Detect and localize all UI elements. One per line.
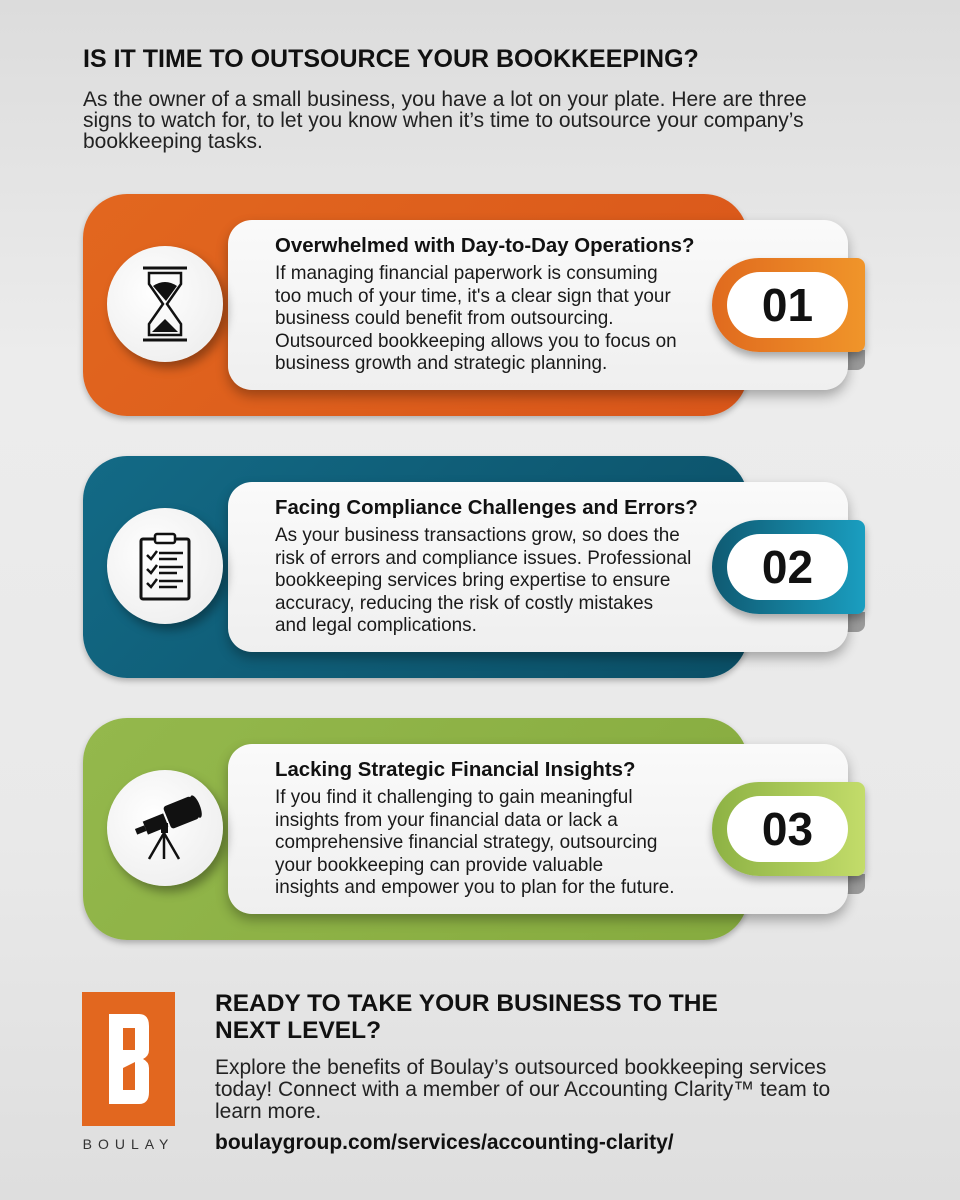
body 3: comprehensive financial strategy, outsourcing bbox=[275, 831, 657, 853]
CTA text: today! Connect with a member of our Accounting Clarity™ team to bbox=[215, 1078, 830, 1101]
CTA text: Explore the benefits of Boulay’s outsourced bookkeeping services bbox=[215, 1056, 826, 1079]
body 2: risk of errors and compliance issues. Professional bbox=[275, 546, 691, 568]
body 1: Outsourced bookkeeping allows you to focus on bbox=[275, 330, 677, 352]
CTA heading: READY TO TAKE YOUR BUSINESS TO THE bbox=[215, 990, 718, 1017]
body 3: your bookkeeping can provide valuable bbox=[275, 854, 603, 876]
CTA heading: NEXT LEVEL? bbox=[215, 1017, 381, 1044]
body 2: As your business transactions grow, so does the bbox=[275, 524, 680, 546]
fold 1 bbox=[846, 350, 865, 370]
body 3: insights and empower you to plan for the future. bbox=[275, 876, 675, 898]
intro text: bookkeeping tasks. bbox=[83, 130, 263, 153]
body 2 bbox=[275, 524, 691, 636]
heading 2: Facing Compliance Challenges and Errors? bbox=[275, 497, 698, 519]
badge 02 bbox=[712, 520, 865, 614]
logo: BOULAY bbox=[83, 1136, 174, 1152]
icon: telescope bbox=[107, 770, 223, 886]
body 1: too much of your time, it's a clear sign that your bbox=[275, 284, 671, 306]
CTA text: learn more. bbox=[215, 1100, 321, 1123]
panel 1 bbox=[80, 194, 870, 422]
panel 3 bbox=[80, 718, 870, 946]
panel 1: 01 bbox=[762, 279, 813, 331]
heading 1: Overwhelmed with Day-to-Day Operations? bbox=[275, 235, 694, 257]
body 3: If you find it challenging to gain meaningful bbox=[275, 786, 633, 808]
url: boulaygroup.com/services/accounting-clarity/ bbox=[215, 1131, 674, 1154]
title: IS IT TIME TO OUTSOURCE YOUR BOOKKEEPING? bbox=[83, 45, 699, 73]
badge 01 bbox=[712, 258, 865, 352]
intro text: signs to watch for, to let you know when it’s time to outsource your company’s bbox=[83, 109, 804, 132]
body 2: and legal complications. bbox=[275, 614, 477, 636]
body 1 bbox=[275, 262, 677, 374]
logo bbox=[82, 992, 175, 1152]
heading 3: Lacking Strategic Financial Insights? bbox=[275, 759, 635, 781]
intro text bbox=[83, 88, 807, 153]
body 2: bookkeeping services bring expertise to ensure bbox=[275, 569, 670, 591]
body 1: If managing financial paperwork is consuming bbox=[275, 262, 658, 284]
body 1: business could benefit from outsourcing. bbox=[275, 307, 614, 329]
panel 2: 02 bbox=[762, 541, 813, 593]
intro text: As the owner of a small business, you have a lot on your plate. Here are three bbox=[83, 88, 807, 111]
body 3 bbox=[275, 786, 675, 898]
panel 2 bbox=[80, 456, 870, 684]
body 2: accuracy, reducing the risk of costly mistakes bbox=[275, 592, 653, 614]
panel 3: 03 bbox=[762, 803, 813, 855]
body 3: insights from your financial data or lack a bbox=[275, 808, 618, 830]
icon: hourglass bbox=[107, 246, 223, 362]
badge 03 bbox=[712, 782, 865, 876]
icon: clipboard bbox=[107, 508, 223, 624]
body 1: business growth and strategic planning. bbox=[275, 352, 607, 374]
CTA heading bbox=[215, 990, 718, 1044]
CTA text bbox=[215, 1056, 830, 1123]
